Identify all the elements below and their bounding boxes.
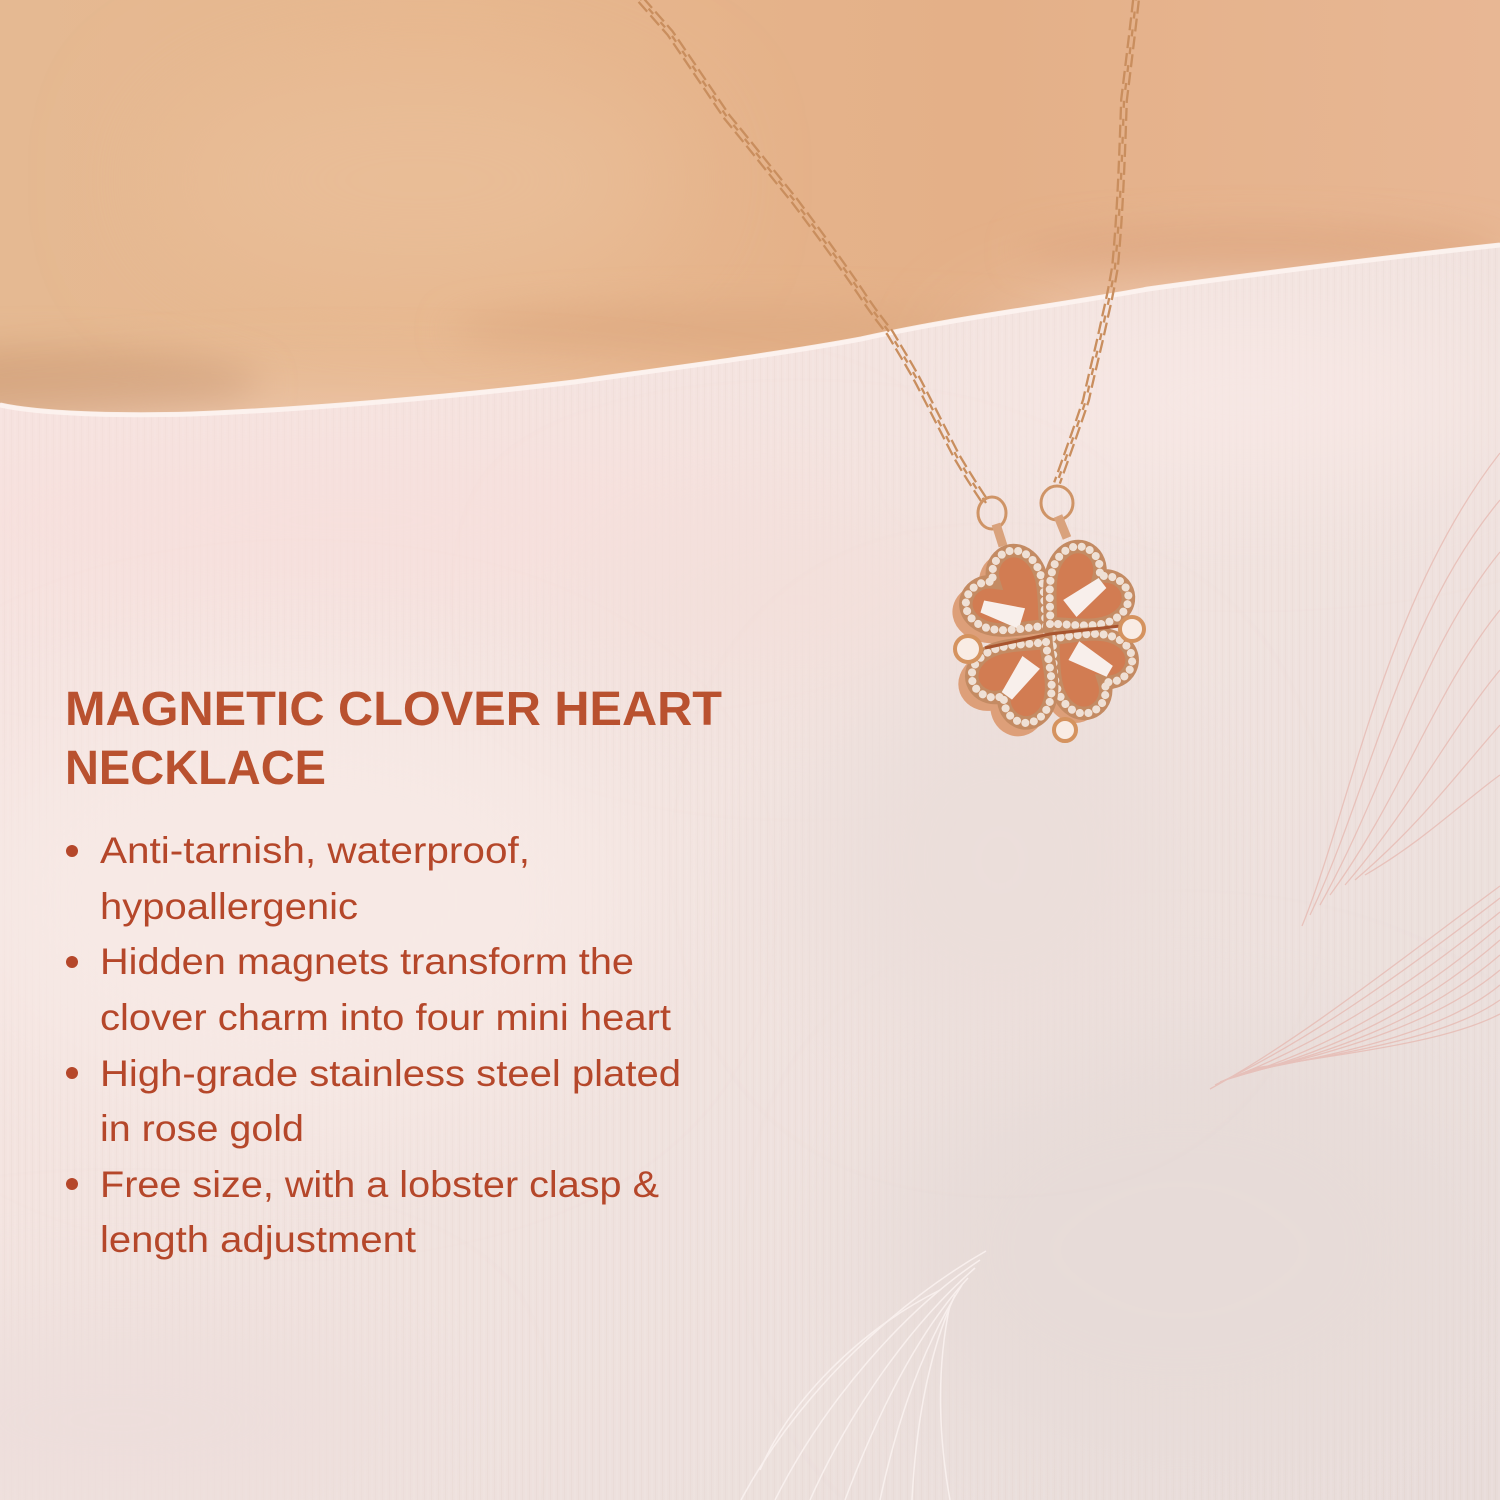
heart: top right xyxy=(1021,538,1137,654)
pendant metal back xyxy=(949,550,1131,739)
clover hearts xyxy=(957,538,1141,731)
bullet 3 xyxy=(66,1053,681,1149)
title: NECKLACE xyxy=(65,742,326,795)
bullet 2: Hidden magnets transform the xyxy=(100,941,634,982)
bullet 3: in rose gold xyxy=(100,1108,304,1149)
bullet 3: High-grade stainless steel plated xyxy=(100,1053,681,1094)
bullet 4: length adjustment xyxy=(100,1219,417,1260)
small solid hearts xyxy=(955,617,1144,741)
skin background xyxy=(0,0,1500,460)
left chain xyxy=(639,0,988,505)
bullet 1 xyxy=(66,830,530,927)
title: MAGNETIC CLOVER HEART xyxy=(65,683,722,736)
feature list xyxy=(66,830,681,1260)
bullet 1: Anti-tarnish, waterproof, xyxy=(100,830,530,871)
heart: bottom right xyxy=(1025,606,1141,722)
bullet 1: hypoallergenic xyxy=(100,886,358,927)
jump rings xyxy=(978,486,1073,546)
decorative wisps right xyxy=(1210,453,1500,1089)
decorative wisps bottom xyxy=(741,1251,986,1500)
title xyxy=(65,683,722,795)
heart: top left xyxy=(957,542,1073,658)
necklace xyxy=(639,0,1144,741)
bullet 2: clover charm into four mini heart xyxy=(100,997,672,1038)
bullet 2 xyxy=(66,941,672,1038)
bullet 4 xyxy=(66,1164,659,1260)
centre seam xyxy=(985,626,1120,648)
heart: bottom left xyxy=(963,616,1079,731)
bullet 4: Free size, with a lobster clasp & xyxy=(100,1164,659,1205)
right chain xyxy=(1054,0,1139,484)
